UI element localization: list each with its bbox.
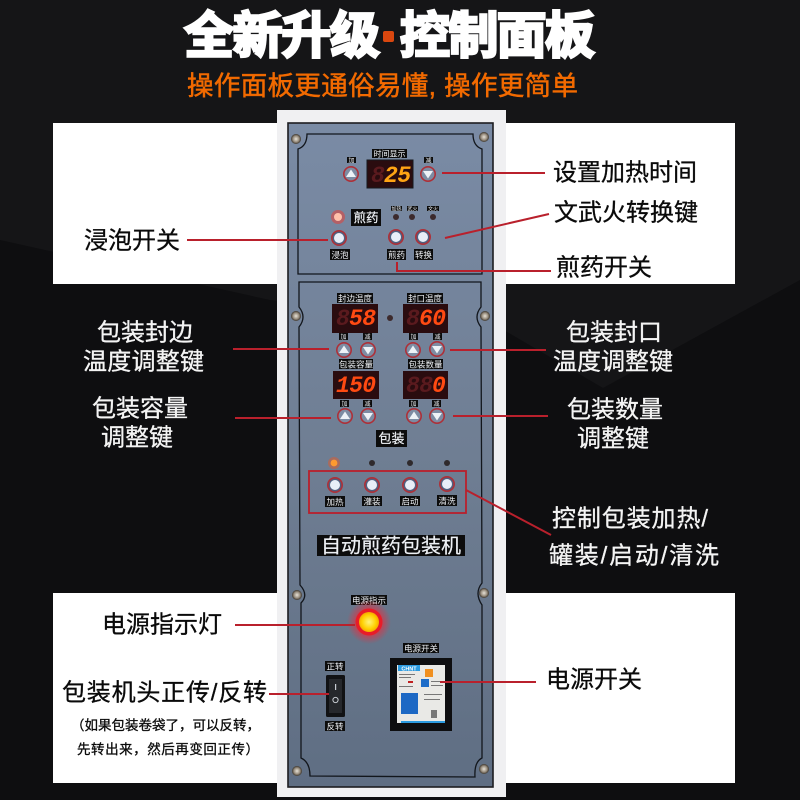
time display: 时间显示 xyxy=(374,148,406,158)
volume buttons: 减 xyxy=(364,400,371,408)
callout: soak switch: 浸泡开关 xyxy=(84,228,180,254)
metal plate xyxy=(288,123,493,787)
callout: packing controls xyxy=(466,490,719,570)
rocker switch xyxy=(325,661,345,732)
seal temperature display xyxy=(403,293,448,333)
callout: volume xyxy=(92,396,331,452)
quantity buttons: 加 xyxy=(410,400,417,408)
panel frame xyxy=(277,110,506,797)
time display: 8 xyxy=(371,163,385,189)
seal temperature display: 封口温度 xyxy=(408,294,442,304)
rocker switch: 正转 xyxy=(326,662,344,672)
centre indicator lamp xyxy=(387,315,393,321)
decoct button: 煎药 xyxy=(388,250,405,260)
outline: packing and power section xyxy=(299,282,482,777)
packaging control buttons: 灌装 xyxy=(363,496,381,506)
soak button: 浸泡 xyxy=(331,250,349,260)
machine name plate: 自动煎药包装机 xyxy=(321,534,461,558)
edge temperature display: 8 xyxy=(336,306,350,332)
callout: quantity: 调整键 xyxy=(577,426,649,452)
callout: power switch: 电源开关 xyxy=(546,666,642,694)
panel: control cabinet xyxy=(277,110,506,797)
decoction label and soak lamp: 煎药 xyxy=(353,210,379,225)
callout: head direction: 包装机头正传/反转 xyxy=(62,680,267,706)
outline: heating section xyxy=(298,134,482,274)
callout: packing controls: 控制包装加热/ xyxy=(552,506,708,532)
callout: heat mode switch xyxy=(445,200,698,238)
callout: heating time: 设置加热时间 xyxy=(553,160,697,186)
volume display xyxy=(333,359,379,399)
packaging control buttons xyxy=(325,477,457,507)
power switch: CHNT xyxy=(401,666,417,672)
switch button: 转换 xyxy=(415,250,432,260)
soak button xyxy=(330,231,350,260)
packaging control buttons: 启动 xyxy=(401,496,419,506)
switch button xyxy=(414,230,433,260)
seal temperature buttons xyxy=(406,333,444,357)
callout: quantity xyxy=(453,396,663,452)
title xyxy=(184,8,595,64)
callout: head direction: （如果包装卷袋了，可以反转， xyxy=(71,718,260,733)
callout: edge temperature: 包装封边 xyxy=(97,320,193,346)
heat indicator lamps xyxy=(391,206,439,220)
callout: decoction switch xyxy=(397,254,652,282)
heat indicator lamps: 文火 xyxy=(428,206,438,212)
quantity buttons xyxy=(407,400,444,423)
time subtract button xyxy=(421,156,435,181)
title: 控制面板 xyxy=(400,8,595,64)
time add button xyxy=(344,156,358,181)
callout: head direction xyxy=(62,680,329,757)
callout: seal temperature: 温度调整键 xyxy=(553,348,673,376)
rocker switch: 反转 xyxy=(326,722,344,732)
decoction label and soak lamp xyxy=(331,209,381,226)
edge temperature buttons: 加 xyxy=(340,333,347,341)
quantity display: 0 xyxy=(432,373,446,399)
quantity display xyxy=(403,359,448,399)
title dot xyxy=(383,31,394,42)
packaging control buttons: 清洗 xyxy=(438,496,456,506)
volume display: 150 xyxy=(336,373,376,399)
callout: power lamp: 电源指示灯 xyxy=(102,612,222,638)
packaging lamps xyxy=(328,457,450,469)
quantity display: 88 xyxy=(406,373,433,399)
time subtract button: 减 xyxy=(425,156,432,164)
callout: seal temperature: 包装封口 xyxy=(566,320,662,346)
power switch xyxy=(390,643,452,731)
seal temperature display: 60 xyxy=(419,306,446,332)
quantity display: 包装数量 xyxy=(408,360,443,370)
power switch: 电源开关 xyxy=(404,644,438,654)
edge temperature buttons xyxy=(337,333,375,357)
edge temperature buttons: 减 xyxy=(364,333,371,341)
decoct button xyxy=(387,230,406,260)
heat indicator lamps: 武火 xyxy=(407,206,418,212)
time add button: 加 xyxy=(348,156,355,164)
power indicator lamp: 电源指示 xyxy=(352,596,386,606)
callout: packing controls: 罐装/启动/清洗 xyxy=(549,542,719,570)
callout: volume: 调整键 xyxy=(101,424,173,452)
callout: heat mode switch: 文武火转换键 xyxy=(554,200,698,226)
white band: bottom callouts xyxy=(53,593,735,783)
volume buttons: 加 xyxy=(341,400,348,408)
callout: head direction: 先转出来，然后再变回正传） xyxy=(77,741,259,757)
packaging label: 包装 xyxy=(378,431,405,446)
seal temperature display: 8 xyxy=(406,306,420,332)
edge temperature display: 封边温度 xyxy=(338,294,372,304)
edge temperature display: 58 xyxy=(349,306,376,332)
edge temperature display xyxy=(332,293,378,333)
power indicator lamp xyxy=(347,595,391,644)
white band: top callouts xyxy=(53,123,735,284)
highlight box xyxy=(309,471,466,513)
seal temperature buttons: 减 xyxy=(434,333,441,341)
volume buttons xyxy=(338,400,375,423)
callout: edge temperature xyxy=(83,320,329,376)
subtitle: 操作面板更通俗易懂, 操作更简单 xyxy=(187,71,578,101)
quantity buttons: 减 xyxy=(433,400,440,408)
title: 全新升级 xyxy=(184,8,380,64)
callout: quantity: 包装数量 xyxy=(567,396,663,424)
packaging control buttons: 加热 xyxy=(326,497,344,507)
seal temperature buttons: 加 xyxy=(410,333,417,341)
callout: edge temperature: 温度调整键 xyxy=(83,348,204,376)
screws xyxy=(291,132,490,776)
volume display: 包装容量 xyxy=(339,360,373,370)
heat indicator lamps: 加热 xyxy=(391,206,402,212)
callout: seal temperature xyxy=(450,320,673,376)
callout: volume: 包装容量 xyxy=(92,396,188,422)
time display: 25 xyxy=(384,163,411,189)
time display xyxy=(367,148,413,189)
callout: decoction switch: 煎药开关 xyxy=(556,254,652,282)
